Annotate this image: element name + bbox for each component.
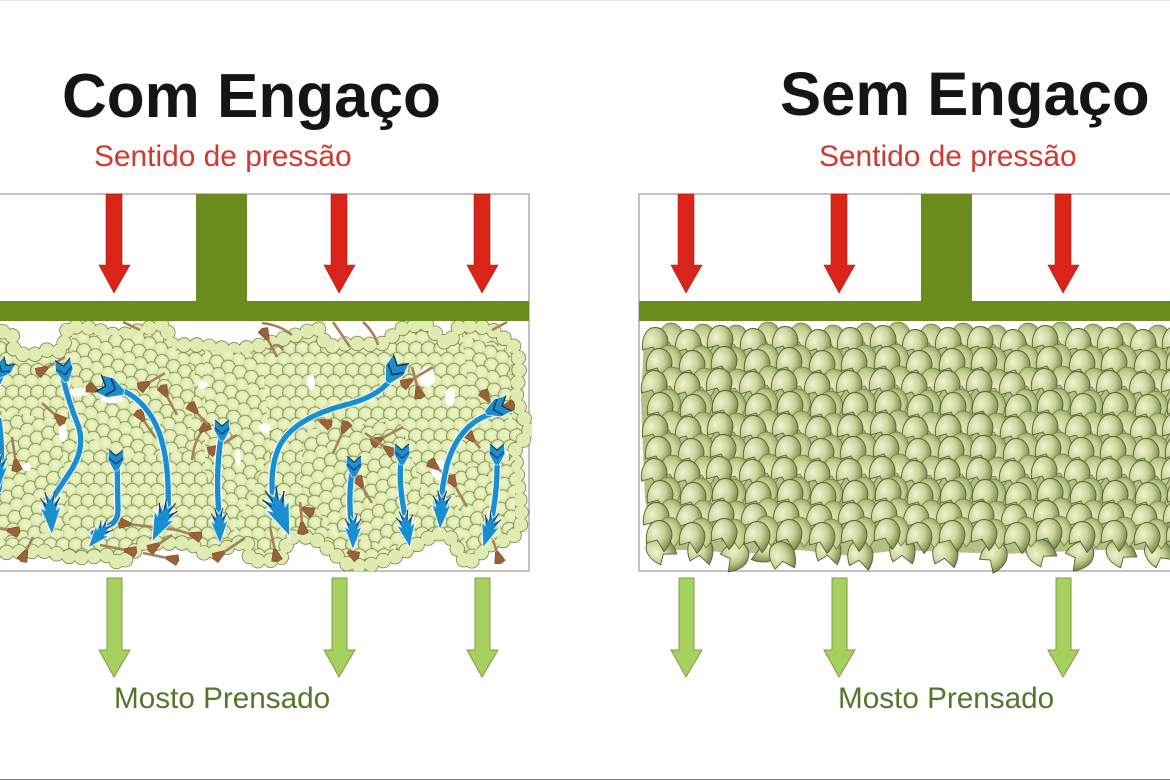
- stems: [0, 330, 513, 562]
- label: pressure direction left: Sentido de pressão: [94, 140, 352, 173]
- press frame left: [0, 194, 529, 571]
- press plate left: [0, 194, 529, 321]
- green must arrows left: [99, 578, 498, 677]
- green must arrows right: [671, 578, 1079, 677]
- press frame right: [639, 194, 1170, 571]
- label: pressed must right: Mosto Prensado: [838, 682, 1054, 715]
- label: pressed must left: Mosto Prensado: [114, 682, 330, 715]
- red pressure arrows left: [99, 194, 498, 293]
- title: Sem Engaço: Sem Engaço: [780, 60, 1150, 129]
- crushed grape skins: [641, 322, 1170, 577]
- panel: press with stems: [0, 194, 530, 677]
- press plate right: [639, 194, 1170, 321]
- gaps between clusters: [23, 367, 509, 480]
- label: pressure direction right: Sentido de pressão: [819, 140, 1077, 173]
- red pressure arrows right: [671, 194, 1079, 293]
- panel: press without stems: [639, 194, 1170, 677]
- grape clusters with stems: [0, 322, 530, 566]
- title: Com Engaço: Com Engaço: [62, 62, 441, 131]
- blue juice flow arrows: [0, 354, 512, 553]
